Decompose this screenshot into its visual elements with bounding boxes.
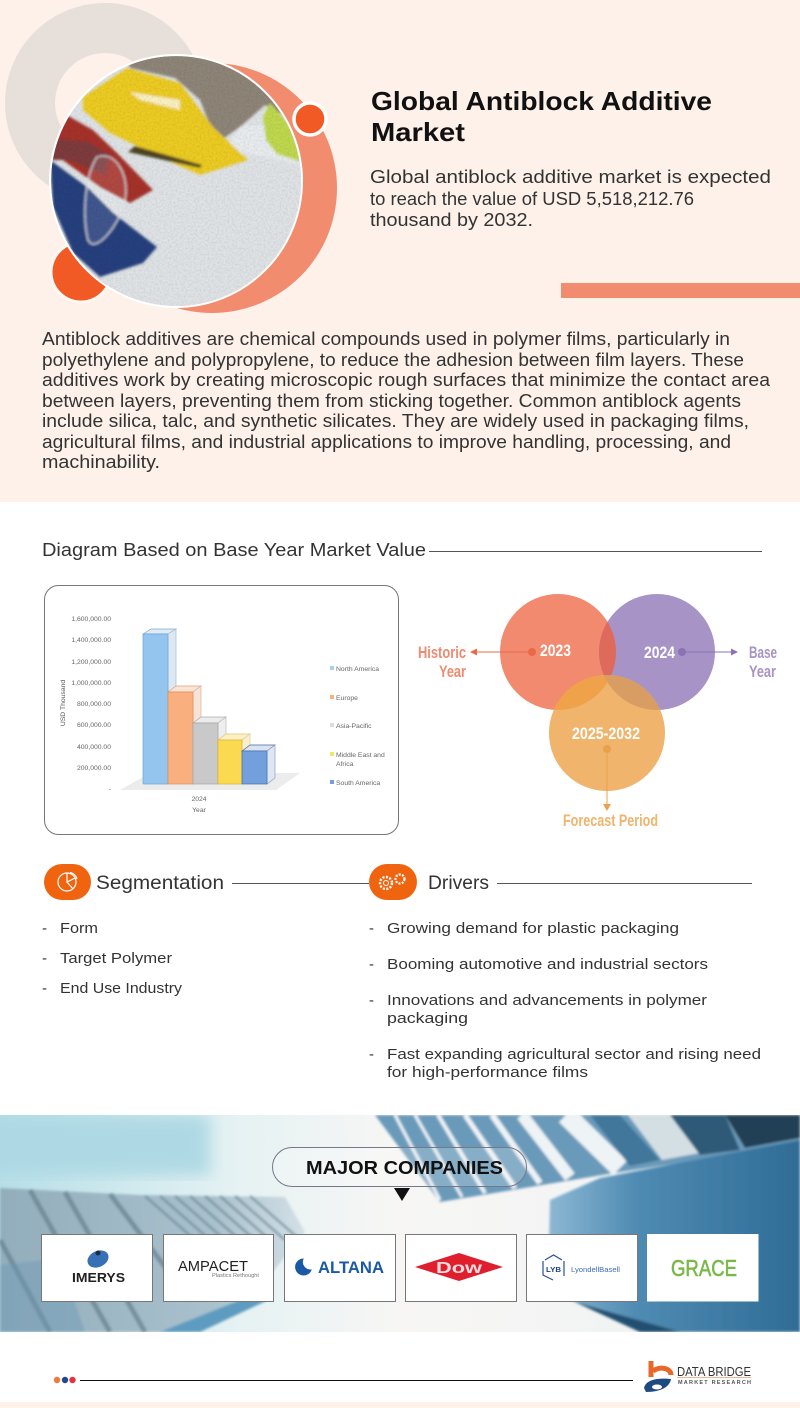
heading: segmentation: Segmentation	[96, 873, 224, 894]
title: Global Antiblock Additive	[371, 86, 712, 116]
label: base year: Base	[749, 643, 777, 662]
label: base year: Year	[749, 662, 776, 681]
logo card: Grace: GRACE	[671, 1255, 737, 1281]
legend: Europe	[336, 695, 358, 702]
y axis labels: -	[109, 786, 111, 793]
arrow: forecast period	[603, 745, 611, 811]
market value summary: Global antiblock additive market is expected	[370, 166, 771, 187]
drivers list: -	[369, 920, 374, 937]
segmentation list: -	[42, 980, 47, 997]
label: historic year	[418, 643, 466, 681]
banner background: buildings	[0, 1115, 800, 1332]
logo card: Imerys: IMERYS	[72, 1270, 125, 1285]
salmon crescent	[87, 63, 337, 313]
hero graphic	[30, 28, 337, 313]
year values: 2024	[644, 643, 675, 662]
description paragraph: agricultural films, and industrial applications to improve handling, processing, and	[42, 432, 731, 452]
y axis labels: 1,600,000.00	[71, 616, 111, 623]
overlap historic and forecast	[554, 675, 611, 710]
arrow: base year	[678, 648, 738, 656]
x axis labels: 2024	[191, 796, 207, 803]
logo card: Ampacet: Plastics Rethought	[212, 1273, 259, 1279]
logo card: LyondellBasell: LyondellBasell	[571, 1265, 620, 1274]
legend: South America	[336, 780, 380, 787]
market value summary: thousand by 2032.	[370, 209, 533, 230]
market value summary: to reach the value of USD 5,518,212.76	[370, 188, 694, 209]
logo card: LyondellBasell	[526, 1234, 638, 1302]
legend	[330, 666, 385, 787]
y axis labels	[71, 616, 111, 793]
market value summary	[370, 166, 771, 230]
footer	[54, 1361, 751, 1392]
arrow: historic year	[470, 648, 536, 656]
segmentation list: End Use Industry	[60, 980, 183, 997]
photo white outline	[50, 55, 302, 307]
logo card: Ampacet: AMPACET	[178, 1258, 248, 1275]
x axis labels	[191, 796, 207, 814]
bottom strip	[0, 1402, 800, 1408]
segmentation list: -	[42, 950, 47, 967]
bar: Europe	[168, 686, 201, 784]
legend: Middle East and	[336, 752, 385, 759]
description paragraph: between layers, preventing them from sticking together. Common antiblock agents	[42, 391, 741, 411]
logo card: Altana	[284, 1234, 396, 1302]
drivers list: for high-performance films	[387, 1064, 588, 1081]
logo card: Grace	[647, 1234, 758, 1302]
x axis labels: Year	[192, 807, 207, 814]
logo card: LyondellBasell: LYB	[546, 1265, 562, 1274]
orange circle bottom left	[51, 242, 111, 302]
y axis title: USD Thousand	[60, 680, 67, 726]
segmentation list: Target Polymer	[60, 950, 172, 967]
decorative grey ring	[30, 28, 180, 178]
footer dots	[54, 1377, 76, 1383]
logo: Data Bridge Market Research	[644, 1361, 751, 1392]
label: historic year: Year	[439, 662, 466, 681]
overlap base and forecast	[604, 675, 660, 710]
bar: North America	[143, 629, 176, 784]
drivers list: packaging	[387, 1010, 468, 1027]
logo: Data Bridge Market Research: DATA BRIDGE	[677, 1364, 751, 1379]
drivers list	[369, 920, 761, 1081]
arrow: pointing to logos	[394, 1188, 410, 1201]
circle: base year	[599, 594, 715, 710]
bar: Middle East and Africa	[218, 734, 250, 784]
legend: Asia-Pacific	[336, 723, 372, 730]
legend: Africa	[336, 761, 354, 768]
description paragraph: machinability.	[42, 452, 160, 472]
segmentation list: Form	[60, 920, 98, 937]
drivers list: Booming automotive and industrial sectors	[387, 956, 708, 973]
segmentation list: -	[42, 920, 47, 937]
description paragraph: Antiblock additives are chemical compounds used in polymer films, particularly in	[42, 329, 730, 349]
panel: segmentation	[42, 864, 369, 997]
circle: historic year	[500, 594, 616, 710]
drivers list: -	[369, 956, 374, 973]
logo card: Ampacet	[164, 1234, 274, 1302]
description paragraph	[42, 329, 771, 472]
circle: forecast period	[549, 675, 665, 791]
drivers list: Fast expanding agricultural sector and rising need	[387, 1046, 761, 1063]
logo: Data Bridge Market Research: MARKET RESEARCH	[678, 1380, 751, 1386]
chart floor	[120, 773, 300, 790]
panel: header background	[0, 0, 800, 502]
heading: drivers: Drivers	[428, 873, 489, 894]
logo card: Dow	[406, 1234, 516, 1302]
bar: South America	[242, 745, 275, 784]
y axis labels: 800,000.00	[77, 701, 111, 708]
orange dot top right	[294, 103, 326, 135]
y axis labels: 200,000.00	[77, 765, 111, 772]
y axis labels: 400,000.00	[77, 744, 111, 751]
y axis labels: 600,000.00	[77, 722, 111, 729]
salmon accent bar	[561, 283, 800, 298]
y axis labels: 1,000,000.00	[71, 680, 111, 687]
panel: major companies banner	[0, 1115, 800, 1332]
icon: gears	[369, 864, 417, 900]
venn diagram	[418, 594, 777, 830]
drivers list: Innovations and advancements in polymer	[387, 992, 707, 1009]
label: forecast period: Forecast Period	[563, 811, 658, 830]
label: base year	[749, 643, 777, 681]
logo card: Altana: ALTANA	[318, 1259, 384, 1277]
drivers list: -	[369, 992, 374, 1009]
logo card: Imerys	[42, 1234, 152, 1302]
heading pill: major companies: MAJOR COMPANIES	[306, 1158, 503, 1178]
photo: spilled polymer granules	[50, 55, 304, 309]
bar: Asia-Pacific	[193, 717, 226, 784]
panel: bar chart	[44, 586, 398, 834]
year values: 2023	[540, 641, 571, 660]
bars	[143, 629, 275, 784]
logo card: Dow: Dow	[436, 1260, 483, 1277]
year values: 2025-2032	[572, 724, 640, 743]
description paragraph: include silica, talc, and synthetic silicates. They are widely used in packaging films,	[42, 411, 749, 431]
overlap historic and base	[599, 622, 616, 675]
year values	[540, 641, 675, 743]
segmentation list	[42, 920, 183, 997]
legend: North America	[336, 666, 379, 673]
heading pill: major companies	[272, 1148, 526, 1186]
description paragraph: additives work by creating microscopic rough surfaces that minimize the contact area	[42, 370, 771, 390]
y axis labels: 1,400,000.00	[71, 637, 111, 644]
panel: drivers	[369, 864, 761, 1081]
drivers list: Growing demand for plastic packaging	[387, 920, 679, 937]
title: Market	[371, 117, 465, 147]
drivers list: -	[369, 1046, 374, 1063]
description paragraph: polyethylene and polypropylene, to reduce the adhesion between film layers. These	[42, 350, 744, 370]
icon: pie chart	[44, 864, 91, 900]
title	[371, 86, 712, 147]
label: historic year: Historic	[418, 643, 466, 662]
y axis labels: 1,200,000.00	[71, 659, 111, 666]
diagram heading: Diagram Based on Base Year Market Value	[42, 540, 426, 560]
